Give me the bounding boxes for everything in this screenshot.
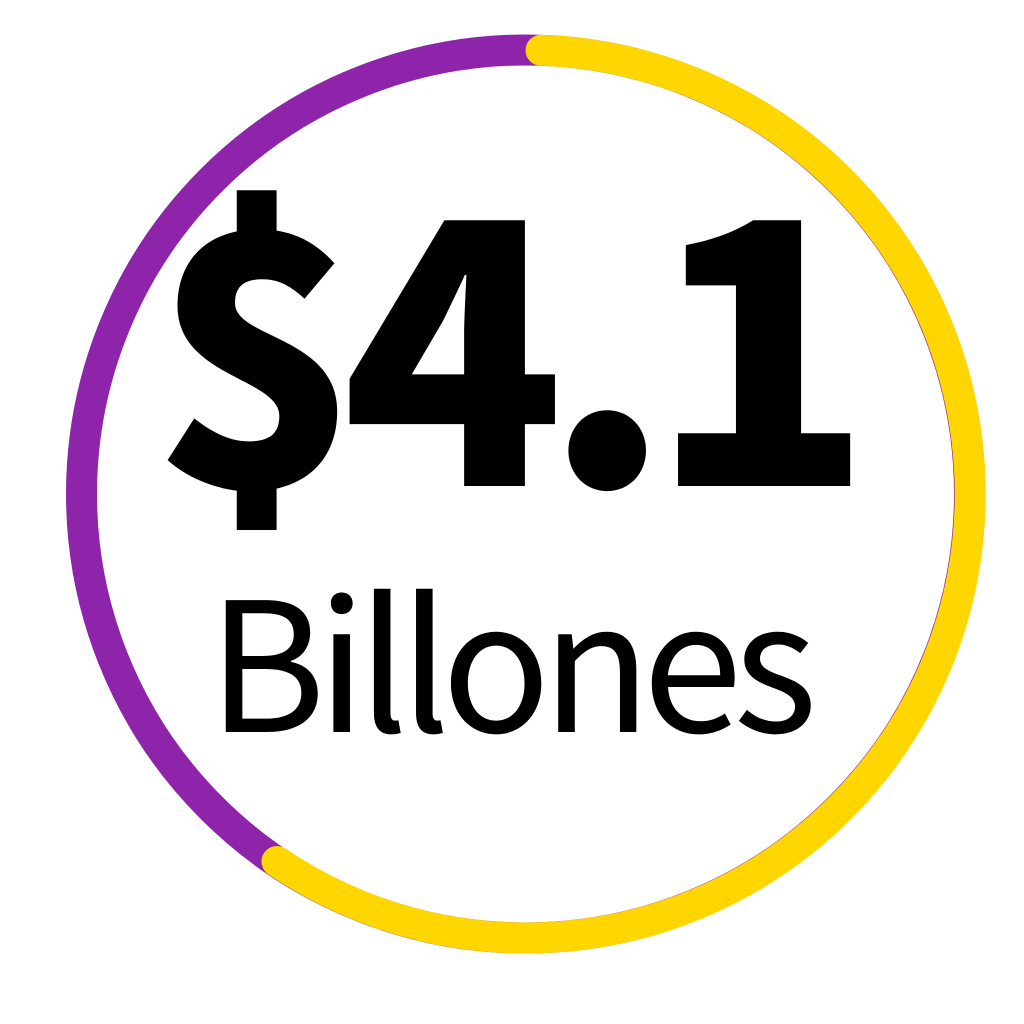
headline value: . [543,62,671,592]
headline value: 1 [650,62,872,592]
headline value: $ [153,84,361,588]
headline value: 4 [342,62,564,592]
ring: yellow progress arc [277,50,970,938]
ring: purple base [82,50,970,938]
unit label: Billones [208,523,811,784]
headline value [153,62,872,592]
